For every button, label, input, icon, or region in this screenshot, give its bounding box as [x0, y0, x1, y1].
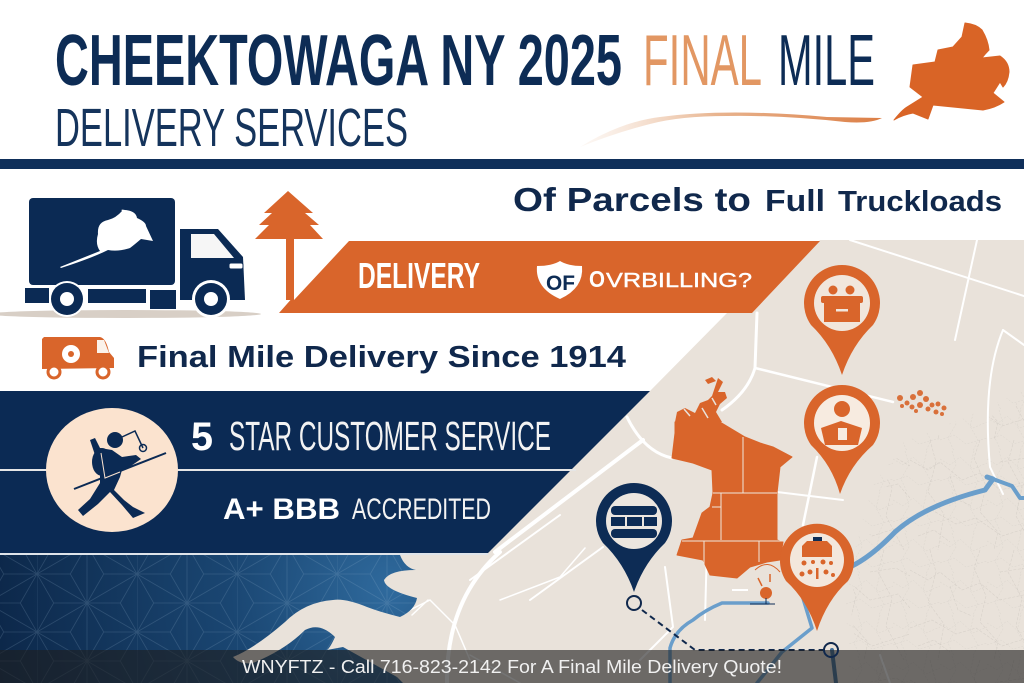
decorative swoosh [580, 112, 882, 147]
small landmark icon [732, 564, 780, 604]
orange dots cluster [897, 390, 946, 416]
tagline: since 1914: Final Mile Delivery Since 1914 [137, 339, 627, 374]
icon: delivery truck [0, 198, 261, 318]
left white panel [0, 170, 1024, 391]
subheading: Of Parcels to [513, 181, 751, 218]
banner text: overbilling [589, 266, 752, 292]
subheading: Truckloads [838, 186, 1002, 218]
title heading: DELIVERY SERVICES [55, 98, 408, 158]
map texture: dense street network [850, 400, 1024, 683]
service text: 5 star: 5 [191, 415, 213, 459]
title heading: FINAL [643, 21, 762, 101]
orange county map [672, 377, 792, 578]
header divider bar [0, 159, 1024, 169]
subheading: Full [765, 183, 825, 218]
dashed route [642, 610, 824, 650]
navy services panel [0, 391, 650, 555]
banner text: overbilling: VRBILLING? [606, 270, 752, 292]
map rivers [670, 477, 1024, 683]
icon: shield with OF [537, 261, 582, 299]
caption text: WNYFTZ - Call 716-823-2142 For A Final Mile Delivery Quote! [242, 657, 782, 677]
map texture: fine street grain [845, 390, 1024, 683]
map background [0, 240, 1024, 683]
subheading [513, 181, 1002, 218]
map roads [410, 240, 1024, 683]
route rings [627, 596, 838, 657]
map pin: person with package [804, 385, 880, 494]
icon: shield with OF: OF [546, 272, 575, 295]
icon: county map silhouette [894, 23, 1009, 120]
map pin: storage [596, 483, 672, 592]
icon: pine tree arrow [255, 191, 323, 300]
bottom left water with pattern [0, 555, 417, 683]
map pin: box [804, 265, 880, 375]
map pin: goods [780, 524, 854, 631]
icon: worker in circle [46, 408, 178, 532]
orange delivery banner [255, 191, 820, 313]
banner text: overbilling: O [589, 266, 605, 292]
service text: BBB: A+ BBB [223, 493, 340, 526]
service text: 5 star [191, 413, 551, 459]
banner text: delivery: DELIVERY [358, 255, 480, 296]
service text: BBB [223, 493, 491, 526]
title heading: MILE [778, 21, 875, 101]
title heading [55, 21, 875, 158]
service text: BBB: ACCREDITED [352, 493, 491, 526]
service text: 5 star: STAR CUSTOMER SERVICE [229, 413, 551, 459]
bottom caption bar [0, 650, 1024, 683]
icon: small orange van [42, 337, 114, 378]
title heading: CHEEKTOWAGA NY 2025 [55, 21, 622, 101]
